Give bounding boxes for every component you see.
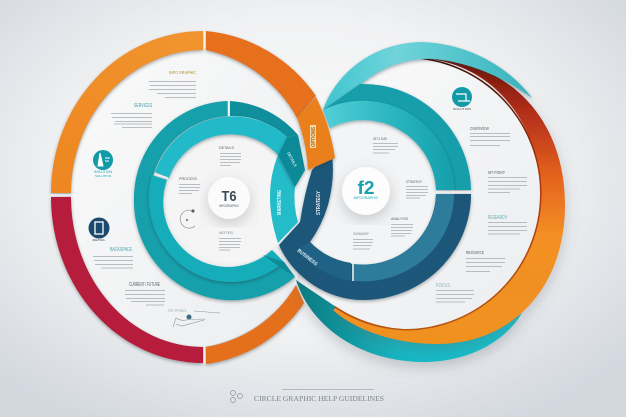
ring: teal bottom (149, 175, 284, 282)
text block: left 2 (111, 103, 152, 128)
center badge right: INFOGRAPHIC (354, 196, 379, 200)
ring end patch (263, 255, 295, 277)
text block: left 5: OK PANEL (168, 308, 187, 313)
text block: inner left 1 (219, 145, 241, 166)
segment: red bottom left (51, 197, 203, 363)
segment: dark orange top right (206, 31, 316, 118)
text block: inner right 2: STRATEGY (406, 179, 422, 184)
text block: inner right 4 (353, 231, 373, 249)
text block: inner right 3 (391, 216, 413, 236)
text block: right 4 (466, 250, 505, 272)
center badge left: T6 (222, 188, 236, 205)
text block: right 2 (488, 170, 527, 192)
ring: light teal top (155, 116, 287, 178)
right teal outer band (323, 84, 471, 190)
segment: orange top left (51, 31, 203, 193)
text block: inner left 3: NOTES (219, 230, 233, 235)
text block: inner right 2 (406, 179, 428, 198)
diagonal blue label: BUSINESS (296, 248, 319, 268)
left outer ring segments (51, 31, 316, 364)
center badge left (208, 177, 250, 219)
icon: navy circle: DETAIL (92, 238, 106, 242)
footer title: CIRCLE GRAPHIC HELP GUIDELINES (254, 394, 384, 403)
text block: right 5 (436, 283, 474, 302)
teal band label: MARKETING (277, 190, 283, 215)
seams (51, 31, 471, 364)
icon: navy circle (88, 218, 110, 242)
text block: left 3 (93, 247, 133, 268)
blue middle band right (354, 194, 454, 281)
text block: right 5: FOCUS (436, 283, 451, 289)
blue middle band left (297, 242, 351, 281)
left teal rings (134, 101, 298, 300)
footer title (230, 390, 384, 403)
text block: right 3 (488, 215, 527, 234)
left circle white panel (71, 50, 312, 347)
ring: outer teal top right (230, 101, 298, 137)
text block: left 3: BACKSPACE (110, 247, 132, 253)
icon: teal circle top right (452, 87, 472, 111)
text block: inner left 2: PROCESS (179, 176, 197, 181)
bottom teal swoosh (296, 280, 522, 362)
text block: right 3: RESEARCH (488, 215, 507, 221)
light teal band left (270, 155, 305, 243)
text block: left 2: SERVICES (134, 103, 152, 109)
center badge right (342, 167, 390, 215)
vertical tab labels (277, 125, 322, 268)
dark teal patch label: DETAILS (286, 151, 298, 168)
icon: orbit dial (180, 210, 195, 228)
text block: left 1: INFO GRAPHIC (169, 70, 197, 75)
icon: teal circle top left: SOLUTION (95, 174, 111, 178)
dark blue ring and band (279, 150, 471, 300)
text block: left 4: CURRENT / FUTURE (129, 282, 160, 288)
center badge left: INFOGRAPHIC (219, 204, 239, 208)
text block: inner right 3: ANALYSIS (391, 216, 408, 221)
icon: teal circle top left: SOLUTION (94, 170, 112, 174)
icon: scribble hand (173, 311, 220, 327)
text block: inner left 2 (179, 176, 200, 194)
right circle white panel (308, 59, 540, 329)
orange tab segment (297, 97, 335, 170)
text block: left 1 (149, 70, 197, 98)
dark teal patch (278, 135, 305, 187)
text block: right 1 (470, 126, 510, 146)
orange red ribbon (333, 58, 565, 344)
blue band label: STRATEGY (316, 190, 322, 215)
segment: orange bottom right (206, 285, 304, 364)
top teal swoosh (323, 42, 532, 110)
text block: inner right 1: GET A TASK (373, 136, 387, 141)
right inner white circle (290, 117, 436, 263)
text block: right 4: RESOURCE (466, 250, 484, 255)
ring: outer teal left (134, 101, 295, 300)
text block: right 2: MY POINT (488, 170, 505, 175)
text block: inner left 1: DETAILS (219, 145, 234, 150)
text block: inner left 3 (219, 230, 241, 250)
orange tab label: OPTIONS (311, 126, 317, 147)
text block: left 4 (125, 282, 165, 305)
right light teal band (323, 101, 454, 190)
icon: footer molecule (230, 390, 242, 402)
icon: teal circle top left (93, 150, 113, 178)
text block: inner right 1 (373, 136, 398, 153)
icon: teal circle top right: SOLUTION (453, 107, 471, 111)
text block: right 1: OVERVIEW (470, 126, 490, 131)
center badge right: f2 (358, 178, 374, 198)
inner white circle (167, 133, 297, 263)
text block: inner right 4: SUMMARY (353, 231, 369, 236)
